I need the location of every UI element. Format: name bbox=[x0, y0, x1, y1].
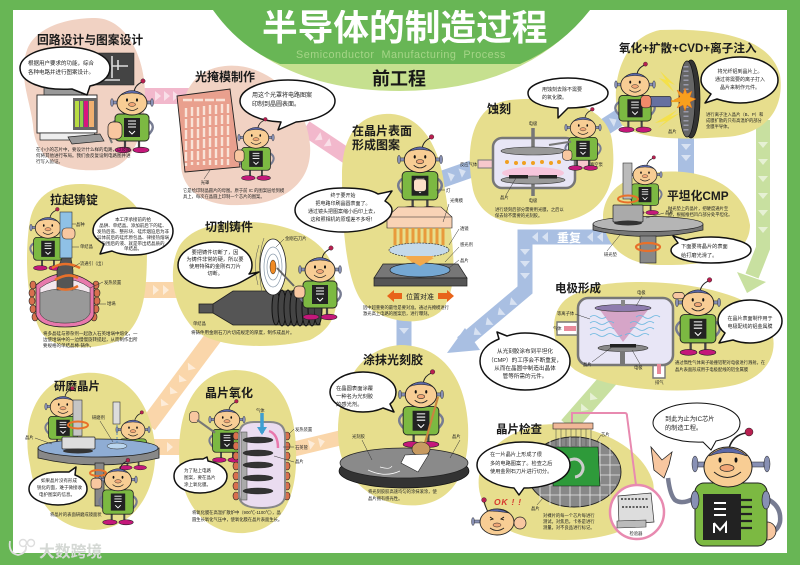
speech bubble: 到此为止为IC芯片 bbox=[665, 415, 714, 423]
caption bbox=[543, 512, 595, 531]
robot: bottom bbox=[91, 458, 137, 525]
furnace: 发热装置 bbox=[295, 426, 313, 433]
computer bbox=[37, 86, 104, 144]
heading: 在晶片表面 bbox=[352, 123, 412, 138]
alignment arrows bbox=[387, 290, 454, 302]
panel: crystal pulling bbox=[27, 184, 173, 349]
watermark bbox=[10, 540, 102, 561]
caption: 成膜扩散的只有高温炉的部分 bbox=[706, 117, 763, 124]
speech bubble bbox=[295, 188, 392, 232]
labels: 发热装置 bbox=[104, 279, 122, 286]
diamond saw bbox=[255, 235, 306, 295]
subtitle: Semiconductor Manufacturing Process bbox=[296, 49, 506, 61]
furnace: 气体 bbox=[256, 407, 265, 414]
caption: 将氧化膜在高温扩散炉中（900℃-1100℃），晶 bbox=[192, 509, 281, 516]
sputter chamber: 电极 bbox=[634, 364, 643, 371]
heading: 研磨晶片 bbox=[54, 379, 100, 393]
robot bbox=[673, 278, 721, 355]
speech bubble: 涂上氧化膜。 bbox=[184, 481, 211, 488]
sputter chamber: 晶片 bbox=[583, 361, 592, 368]
watermark: 大数跨境 bbox=[39, 542, 102, 561]
speech bubble bbox=[240, 80, 335, 130]
polishing table: 研光垫 bbox=[604, 251, 618, 258]
arrow: green, electrode to inspection bbox=[568, 378, 610, 426]
labels: 流通引（出） bbox=[80, 260, 106, 267]
section heading: 前工程 bbox=[372, 69, 426, 89]
caption: 将晶片的表面研磨成镜面状 bbox=[50, 511, 102, 518]
brush bbox=[401, 397, 438, 472]
caption: 要规格的单结晶棒-铸件。 bbox=[43, 342, 94, 349]
ingot: 单结晶 bbox=[193, 320, 206, 327]
panel: oxidation diffusion CVD ion implant bbox=[615, 30, 781, 139]
OK text: OK ! ! bbox=[494, 497, 522, 507]
heading: 光掩模制作 bbox=[195, 69, 255, 84]
caption: 晶片拥有感光性。 bbox=[368, 495, 402, 502]
caption: 何将其他进行布局。我们会反复设制电路图并进 bbox=[36, 152, 131, 159]
caption: 将铸件用金刚石刀片切成规定的厚度，制作成晶片。 bbox=[191, 329, 294, 336]
speech bubble bbox=[20, 47, 110, 95]
caption bbox=[368, 488, 437, 502]
robot: large bbox=[651, 428, 780, 546]
panel: wafer oxidation bbox=[174, 370, 313, 533]
speech bubble bbox=[718, 300, 782, 343]
caption: 保去除不需要的光刻胶。 bbox=[495, 212, 542, 219]
caption bbox=[183, 187, 285, 200]
final character bbox=[651, 403, 780, 546]
heading: 切割铸件 bbox=[205, 219, 253, 234]
heading: 回路设计与图案设计 bbox=[37, 33, 143, 47]
heading: 拉起铸锭 bbox=[50, 192, 98, 207]
speech bubble bbox=[174, 457, 227, 493]
speech bubble: 包围后的液、就是带出结晶质的 bbox=[102, 240, 165, 247]
heading: 晶片氧化 bbox=[205, 385, 253, 400]
tester: 检验器 bbox=[630, 530, 643, 537]
alignment arrows: 位置对准 bbox=[406, 292, 434, 301]
tester bbox=[610, 485, 664, 539]
speech bubble: 锐化的面，难于微接收 bbox=[37, 484, 82, 491]
panel: photomask bbox=[177, 66, 335, 205]
speech bubble: 晶阱、单结晶。添加前后下的硅、 bbox=[99, 222, 167, 229]
panel: wafer grinding bbox=[25, 373, 159, 530]
circuit layout bbox=[90, 53, 134, 85]
caption: 通过惰性气体离子碰撞铝靶对电极进行溅射。在 bbox=[675, 359, 766, 366]
caption: 圆生长氧化气压中，使氧化膜在晶片表面生长。 bbox=[192, 516, 282, 523]
chamber: 晶片 bbox=[500, 194, 509, 201]
heading: 涂抹光刻胶 bbox=[363, 352, 423, 367]
caption bbox=[706, 111, 763, 130]
caption: 对裸片的每一个芯片每进行 bbox=[543, 512, 595, 519]
callout: repeat process bbox=[480, 332, 570, 390]
panel: lithography bbox=[295, 114, 473, 321]
wafer disc: 晶片 bbox=[668, 128, 677, 135]
caption: 因中超重要的最恰是要对准。通过光掩模进行 bbox=[363, 304, 450, 311]
polishing table bbox=[593, 163, 703, 263]
sputter chamber: 等离子体 bbox=[557, 310, 575, 317]
robot: top bbox=[45, 386, 81, 449]
lens system: 光掩模 bbox=[450, 197, 464, 204]
chamber: 真空泵 bbox=[590, 161, 604, 168]
robot bbox=[190, 399, 245, 462]
heading bbox=[352, 123, 412, 152]
connector line to tester bbox=[572, 413, 636, 485]
caption: 晶片表面形成用于电极配线的铝金属膜 bbox=[675, 366, 749, 373]
callout: repeat process: （CMP）的工序会不断重复， bbox=[488, 356, 562, 364]
panel: CMP planarization bbox=[593, 156, 751, 265]
robot bbox=[549, 107, 601, 170]
heading: 平坦化CMP bbox=[667, 189, 729, 203]
mask plate: 光罩 bbox=[201, 179, 210, 186]
callout: repeat process: 管等所需的元件。 bbox=[503, 372, 547, 380]
speech bubble bbox=[701, 57, 778, 103]
robot bbox=[30, 207, 66, 270]
chamber bbox=[460, 120, 604, 204]
speech bubble: 的感光剂。 bbox=[336, 400, 362, 408]
heading: 氧化+扩散+CVD+离子注入 bbox=[619, 41, 757, 55]
speech bubble: 通过将需要的离子打入 bbox=[715, 76, 765, 83]
labels: 晶种 bbox=[76, 221, 85, 228]
speech bubble: 为铸件非常的硬，所以要 bbox=[186, 255, 244, 263]
sputter chamber bbox=[553, 289, 673, 386]
speech bubble: 电极配线的铝金属膜 bbox=[727, 323, 773, 330]
wafer bbox=[339, 433, 469, 488]
panel: etching bbox=[460, 78, 613, 224]
caption bbox=[668, 205, 732, 218]
speech bubble bbox=[29, 467, 87, 505]
arrow: peach, ingot to cut bbox=[140, 285, 185, 295]
speech bubble: 一种名为光刻胶 bbox=[336, 392, 374, 400]
caption: 进行烧刻后部分需要用光膜，之后以 bbox=[495, 206, 564, 213]
panel: wafer inspection bbox=[472, 413, 664, 540]
speech bubble: 切断。 bbox=[207, 269, 223, 277]
speech bubble: 要把铸件切断了，因 bbox=[192, 248, 238, 256]
robot: right bbox=[116, 411, 150, 470]
wafer: 光刻胶 bbox=[352, 433, 366, 440]
heading: 电极形成 bbox=[555, 281, 601, 295]
robot: OK head bbox=[472, 497, 526, 535]
caption: 金膜半导体。 bbox=[706, 123, 732, 130]
speech bubble bbox=[93, 208, 173, 255]
speech bubble: 通过镜头把图案缩小后印上去， bbox=[308, 208, 378, 215]
arrow: peach, oxidation to coating bbox=[290, 436, 340, 450]
chamber: 电极 bbox=[529, 120, 538, 127]
speech bubble bbox=[178, 242, 259, 288]
speech bubble: 终于要开始 bbox=[330, 192, 356, 199]
speech bubble: 用蚀刻去除不需要 bbox=[542, 86, 582, 93]
ingot bbox=[193, 290, 322, 327]
heading: 晶片检查 bbox=[496, 422, 542, 436]
speech bubble bbox=[477, 442, 570, 495]
chamber: 反应气体 bbox=[460, 161, 478, 168]
caption: 具上，每次在晶圆上印制一个芯片的图案。 bbox=[183, 193, 265, 200]
lens system: 晶片 bbox=[460, 257, 469, 264]
robot bbox=[398, 370, 444, 447]
caption: 将光刻胶胶高速均匀的涂抹滚涂，使 bbox=[368, 488, 437, 495]
sputter chamber: 气体 bbox=[553, 325, 562, 332]
speech bubble: 使用金刚石刀片进行切分。 bbox=[490, 467, 552, 475]
arrow: blue, etching to ion implant bbox=[600, 112, 628, 130]
mask plate bbox=[177, 89, 240, 186]
caption: 在小小的芯片中，要设计什么样的电路，以及面 bbox=[36, 146, 131, 153]
caption: 行写入验证。 bbox=[36, 158, 63, 165]
furnace: 晶片 bbox=[295, 458, 304, 465]
arrow: blue, lithography to etching bbox=[440, 166, 480, 182]
lens system: 感光剂 bbox=[460, 241, 473, 248]
speech bubble: 将光纤铝到晶片上。 bbox=[717, 68, 763, 75]
speech bubble: 印制到晶圆表面。 bbox=[252, 100, 300, 108]
lens system: 灯 bbox=[446, 187, 451, 194]
furnace: 石英管 bbox=[295, 444, 309, 451]
panel: circuit design bbox=[20, 18, 154, 170]
arrow: blue repeat loop bbox=[447, 230, 612, 353]
speech bubble bbox=[653, 403, 740, 450]
robot bbox=[397, 135, 443, 212]
grinding table bbox=[25, 400, 159, 506]
caption bbox=[495, 206, 564, 219]
speech bubble: 在晶圆表面涂覆 bbox=[336, 384, 374, 392]
caption bbox=[36, 146, 131, 165]
caption: 将多晶硅与掺杂剂一起放入石英坩埚中熔化，一 bbox=[43, 330, 138, 337]
callout: repeat process: 从光刻胶涂布到平坦化 bbox=[497, 347, 553, 355]
speech bubble: 这和照相机的原理差不多呀！ bbox=[310, 216, 376, 223]
speech bubble bbox=[528, 78, 608, 118]
arrow: blue, lithography to coating bbox=[399, 318, 409, 350]
caption: 边使坩埚中的一边慢慢旋转提起，从而制作出所 bbox=[43, 336, 138, 343]
arrow: peach, cut to grinding bbox=[148, 335, 215, 425]
caption bbox=[192, 509, 282, 523]
heading: 蚀刻 bbox=[487, 101, 511, 116]
wafer under test: 芯片 bbox=[601, 431, 610, 438]
speech bubble: 在晶片表面制作用于 bbox=[727, 315, 773, 322]
panel: electrode formation bbox=[553, 278, 782, 390]
polishing table: 晶片 bbox=[665, 209, 674, 216]
title: 半导体的制造过程 bbox=[262, 8, 548, 48]
grinding table: 晶片 bbox=[25, 434, 34, 441]
labels: 坩埚 bbox=[107, 300, 116, 307]
arrow: pink, design to mask bbox=[140, 91, 195, 101]
header band bbox=[213, 8, 590, 91]
crucible bbox=[29, 274, 100, 327]
robot bbox=[108, 79, 154, 153]
lens system bbox=[374, 187, 473, 286]
speech bubble bbox=[671, 236, 751, 263]
wafer: 晶片 bbox=[452, 433, 461, 440]
speech bubble: 电护图案的信息。 bbox=[39, 491, 75, 498]
ingot bbox=[52, 212, 80, 290]
speech bubble: 给打磨光滑了。 bbox=[681, 251, 717, 259]
caption: 测量。对不良品进行标记。 bbox=[543, 524, 595, 531]
speech bubble: 多的电路图案了。检查之后 bbox=[490, 459, 552, 467]
caption: 测试。对焦后，卡条是进行 bbox=[543, 518, 595, 525]
speech bubble: 用这个光罩将电路图案 bbox=[252, 91, 312, 99]
panel: ingot cutting bbox=[173, 219, 342, 346]
arrow: blue, ion implant to CMP bbox=[681, 132, 691, 178]
labels bbox=[72, 221, 122, 307]
label: repeat: 重复 bbox=[557, 230, 581, 245]
caption bbox=[43, 330, 138, 349]
caption: 激光高上电路的图案后，进行曝刻。 bbox=[363, 310, 432, 317]
speech bubble: 在一片晶片上形成了很 bbox=[490, 450, 542, 458]
wafer under test bbox=[527, 423, 621, 512]
speech bubble: 为了贴上电路 bbox=[184, 467, 211, 474]
panel: photoresist coating bbox=[330, 345, 469, 505]
speech bubble: 根据用户要求的功能，综合 bbox=[28, 59, 95, 67]
robot bbox=[628, 156, 662, 215]
speech bubble: 各种电路并进行图案设计。 bbox=[28, 68, 94, 76]
caption bbox=[675, 359, 766, 373]
caption bbox=[363, 304, 450, 317]
speech bubble: 本工序承接前的拾 bbox=[115, 216, 151, 223]
sputter chamber: 排气 bbox=[655, 379, 664, 386]
grinding table: 研磨剂 bbox=[92, 414, 105, 421]
speech bubble: 把电路印刷晶圆表面了。 bbox=[315, 200, 371, 207]
speech bubble: 使用特殊的金刚石刀片 bbox=[189, 262, 241, 270]
caption: 进行离子注入晶片（B、P）和 bbox=[706, 111, 763, 118]
wafer disc bbox=[655, 60, 700, 138]
wafer under test: 晶片 bbox=[531, 505, 540, 512]
caption: 原，根据推挡凹凸部分处平坦化。 bbox=[668, 211, 732, 218]
speech bubble: 的氧化膜。 bbox=[542, 94, 567, 101]
speech bubble: 的制造工程。 bbox=[665, 424, 702, 432]
arrow: green, ion implant to electrode bbox=[737, 120, 768, 293]
arrow: peach, grinding to oxidation bbox=[150, 442, 190, 452]
sputter chamber: 电极 bbox=[637, 289, 646, 296]
callout: repeat process: 从而在晶圆中制造出晶体 bbox=[494, 364, 556, 372]
chamber: 电极 bbox=[529, 197, 538, 204]
caption: 它是绘印制晶圆片的母图。原于前 IC 的图案层绘到模 bbox=[183, 187, 285, 194]
labels: 单结晶 bbox=[80, 243, 93, 250]
heading: 形成图案 bbox=[352, 137, 400, 152]
speech bubble: 晶片来制作元件。 bbox=[720, 84, 760, 91]
caption: 抛光垫上的晶片，把硬度通片至 bbox=[668, 205, 729, 212]
speech bubble: 下面要将晶片的表面 bbox=[681, 242, 728, 250]
diamond saw: 金刚石刀片 bbox=[285, 235, 306, 242]
robot bbox=[294, 246, 342, 320]
speech bubble: 发热后盖、整形块、硅炸烟迫后为非 bbox=[97, 228, 169, 235]
robot bbox=[235, 117, 274, 180]
speech bubble: 如果晶片没有形成 bbox=[41, 477, 77, 484]
lens system: 透镜 bbox=[460, 225, 469, 232]
speech bubble: 单结晶。 bbox=[124, 245, 142, 252]
speech bubble: 图案，要在晶片 bbox=[184, 474, 216, 481]
furnace bbox=[233, 407, 313, 508]
speech bubble bbox=[330, 372, 396, 412]
arrow: pink, mask to lithography bbox=[305, 128, 350, 158]
speech bubble: 异体前后的硅炸原包晶、律接热熔埚 bbox=[97, 234, 169, 241]
robot bbox=[615, 62, 681, 132]
